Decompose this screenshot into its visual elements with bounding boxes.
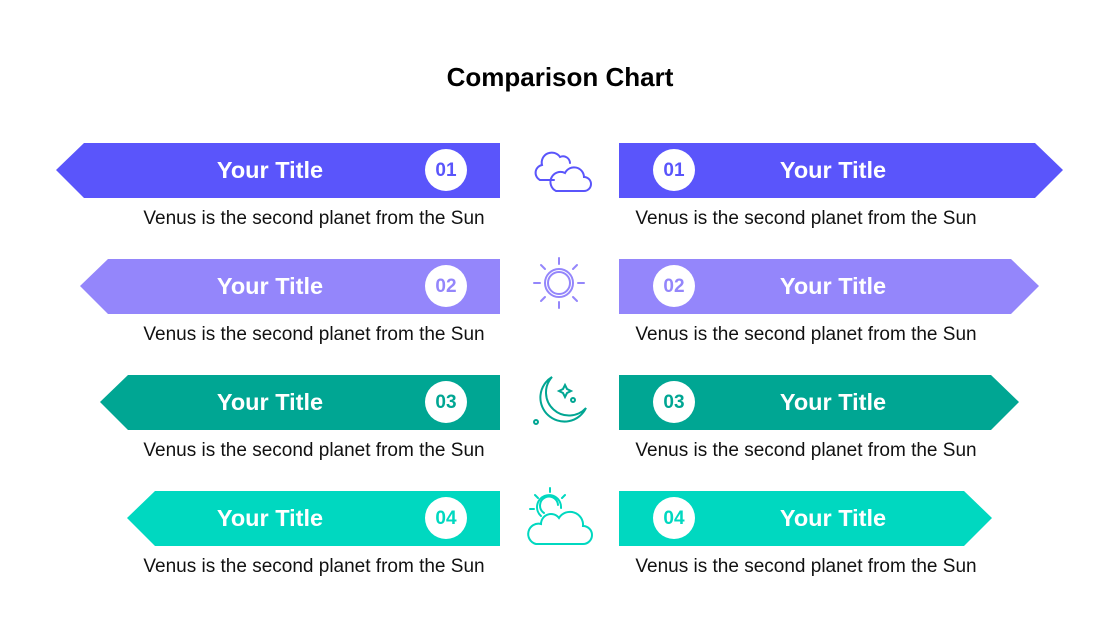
bar: right 01 [619, 143, 1063, 198]
row 2 left [143, 265, 485, 345]
row 2 right [635, 265, 977, 345]
icon: sun cloud [528, 488, 592, 544]
bar: right 02 [619, 259, 1039, 314]
bar: right 03 [619, 375, 1019, 430]
text: Your Title [217, 157, 323, 183]
text: Your Title [780, 157, 886, 183]
row 4 right [635, 497, 977, 577]
row 3 left [143, 381, 485, 461]
icon: sun [534, 258, 584, 308]
text: Venus is the second planet from the Sun [635, 324, 977, 345]
text: Your Title [217, 505, 323, 531]
text: 04 [435, 508, 457, 529]
row 1 right [635, 149, 977, 229]
text: Your Title [780, 505, 886, 531]
bar: left 03 [100, 375, 500, 430]
text: 03 [435, 392, 457, 413]
text: Venus is the second planet from the Sun [143, 556, 485, 577]
text: Venus is the second planet from the Sun [635, 440, 977, 461]
icon: moon [534, 377, 586, 424]
text: Venus is the second planet from the Sun [143, 440, 485, 461]
text: 02 [663, 276, 685, 297]
text: Venus is the second planet from the Sun [143, 208, 485, 229]
text: Your Title [780, 389, 886, 415]
text: 01 [435, 160, 457, 181]
text: 04 [663, 508, 685, 529]
text: 01 [663, 160, 685, 181]
text: Venus is the second planet from the Sun [635, 556, 977, 577]
row 4 left [143, 497, 485, 577]
bar: left 02 [80, 259, 500, 314]
icon: clouds [536, 153, 591, 191]
text: Venus is the second planet from the Sun [635, 208, 977, 229]
text: 03 [663, 392, 685, 413]
bar: left 04 [127, 491, 500, 546]
bar: left 01 [56, 143, 500, 198]
bar: right 04 [619, 491, 992, 546]
text: Your Title [780, 273, 886, 299]
text: Your Title [217, 273, 323, 299]
text: Your Title [217, 389, 323, 415]
title: Comparison Chart [447, 62, 673, 92]
row 3 right [635, 381, 977, 461]
row 1 left [143, 149, 485, 229]
text: 02 [435, 276, 457, 297]
text: Venus is the second planet from the Sun [143, 324, 485, 345]
